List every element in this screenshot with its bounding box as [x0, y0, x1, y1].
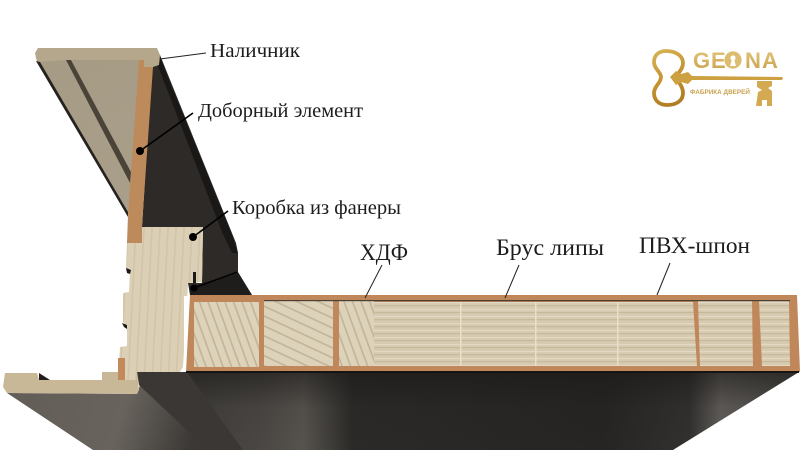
logo tagline: ФАБРИКА ДВЕРЕЙ: [690, 88, 750, 96]
callout: black seal marker: [190, 272, 237, 292]
callout: ХДФ: [360, 240, 408, 298]
callout: коробка из фанеры: Коробка из фанеры: [232, 197, 401, 219]
icon: key bit: [756, 81, 772, 106]
wood block 8: [698, 301, 753, 366]
panel: frame lower dark face: [137, 372, 244, 450]
panel: plywood frame box (коробка): [118, 227, 203, 380]
callout: наличник: Наличник: [210, 40, 300, 62]
icon: keyhole: [724, 51, 742, 69]
panel: top casing (наличник): [35, 48, 160, 217]
callout: наличник: [160, 40, 300, 62]
callout: доборный элемент: Доборный элемент: [198, 100, 363, 122]
logo wordmark: GEONA: [693, 48, 778, 73]
wood cell 1: [194, 302, 259, 367]
callout: доборный элемент: [136, 100, 363, 155]
callout: ПВХ-шпон: [639, 233, 750, 295]
callout: ХДФ: ХДФ: [360, 240, 408, 265]
callout: коробка из фанеры: [189, 197, 401, 241]
icon: key bow: [654, 51, 683, 105]
panel: MDF extension board (доборный элемент): [127, 60, 153, 243]
panel: lower casing dark face: [7, 385, 212, 450]
logo: GEONA key: [654, 48, 783, 106]
callout: брус липы: Брус липы: [496, 235, 604, 260]
wood cell 3: [339, 301, 374, 366]
callout: брус липы: [496, 235, 604, 298]
panel: door leaf dark face: [187, 372, 799, 450]
callout: ПВХ-шпон: ПВХ-шпон: [639, 233, 750, 258]
wood cell 2: [264, 301, 333, 366]
panel: frame extension dark back face: [142, 55, 252, 295]
panel: bottom casing profile: [3, 358, 139, 394]
wood block 9: [759, 301, 790, 366]
icon: key shaft: [670, 71, 783, 85]
wood blocks 4 to 7: [374, 302, 697, 366]
panel: door leaf cross section: [184, 295, 800, 373]
